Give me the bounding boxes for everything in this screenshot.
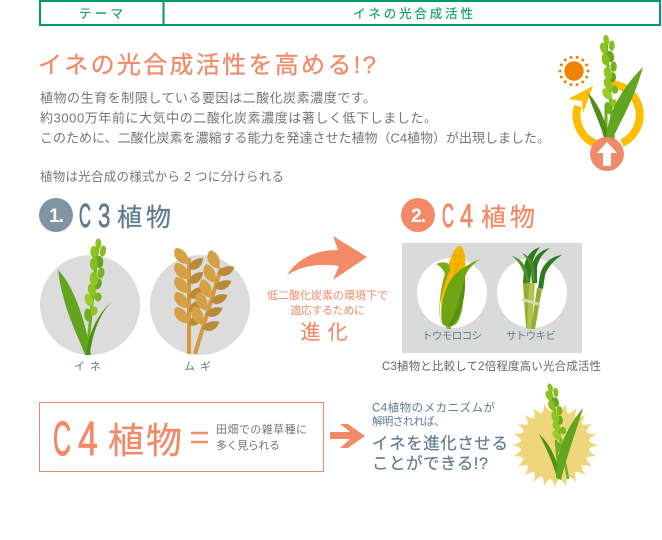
callout: C4 definition: 植物 (108, 420, 182, 461)
callout: C4 definition: 田畑での雑草種に (216, 422, 307, 436)
heading: C3 plants: 植物 (117, 204, 171, 232)
evolution text: 進化 (300, 321, 354, 344)
heading: C4 plants: C (442, 197, 454, 235)
conclusion text (372, 400, 508, 473)
conclusion text: C4植物のメカニズムが (372, 400, 496, 414)
heading: C4 plants: 植物 (481, 204, 535, 232)
subheading: 植物は光合成の様式から 2 つに分けられる (40, 169, 284, 184)
intro text block: このために、二酸化炭素を濃縮する能力を発達させた植物（C4植物）が出現しました。 (40, 130, 550, 146)
intro text block (40, 90, 550, 146)
heading: C3 plants: 3 (98, 198, 110, 234)
callout: C4 definition (40, 402, 324, 472)
callout: C4 definition: 多く見られる (216, 438, 280, 452)
panel: rice (40, 238, 140, 373)
icon: corn (436, 246, 480, 329)
icon: rice on sunburst (512, 381, 598, 488)
panel: wheat (150, 248, 250, 373)
header bar: theme: テーマ (79, 7, 123, 21)
arrow: evolution (287, 236, 367, 280)
intro text block: 植物の生育を制限している要因は二酸化炭素濃度です。 (40, 90, 376, 106)
conclusion text: ことができる!? (372, 454, 488, 473)
heading: C4 plants: 4 (460, 198, 473, 235)
evolution text (267, 288, 388, 344)
header bar: theme: イネの光合成活性 (353, 7, 473, 21)
heading: C3 plants (39, 197, 171, 235)
header bar: theme (40, 0, 660, 25)
panel: C4 examples (402, 243, 582, 353)
heading: C4 plants (401, 197, 535, 235)
caption: C4 comparison: C3植物と比較して2倍程度高い光合成活性 (382, 359, 601, 373)
heading: C3 plants: C (79, 197, 91, 235)
panel: rice: イネ (74, 360, 106, 373)
callout: C4 definition: C (53, 412, 71, 466)
main title: イネの光合成活性を高める!? (38, 52, 376, 79)
panel: wheat: ムギ (184, 360, 216, 373)
panel: C4 examples: トウモロコシ (422, 330, 482, 342)
heading: C4 plants: 2. (411, 206, 425, 227)
evolution text: 低二酸化炭素の環境下で (267, 288, 388, 302)
conclusion text: イネを進化させる (372, 434, 508, 453)
heading: C3 plants: 1. (49, 206, 63, 227)
arrow: leads to (330, 424, 365, 448)
icon: sugarcane (512, 247, 562, 329)
conclusion text: 解明されれば、 (372, 414, 445, 428)
panel: C4 examples: サトウキビ (506, 330, 556, 342)
callout: C4 definition: 4 (78, 412, 98, 465)
evolution text: 適応するために (290, 303, 365, 317)
intro text block: 約3000万年前に大気中の二酸化炭素濃度は著しく低下しました。 (40, 110, 437, 126)
icon: rice with sun and cycle arrow (560, 33, 643, 171)
